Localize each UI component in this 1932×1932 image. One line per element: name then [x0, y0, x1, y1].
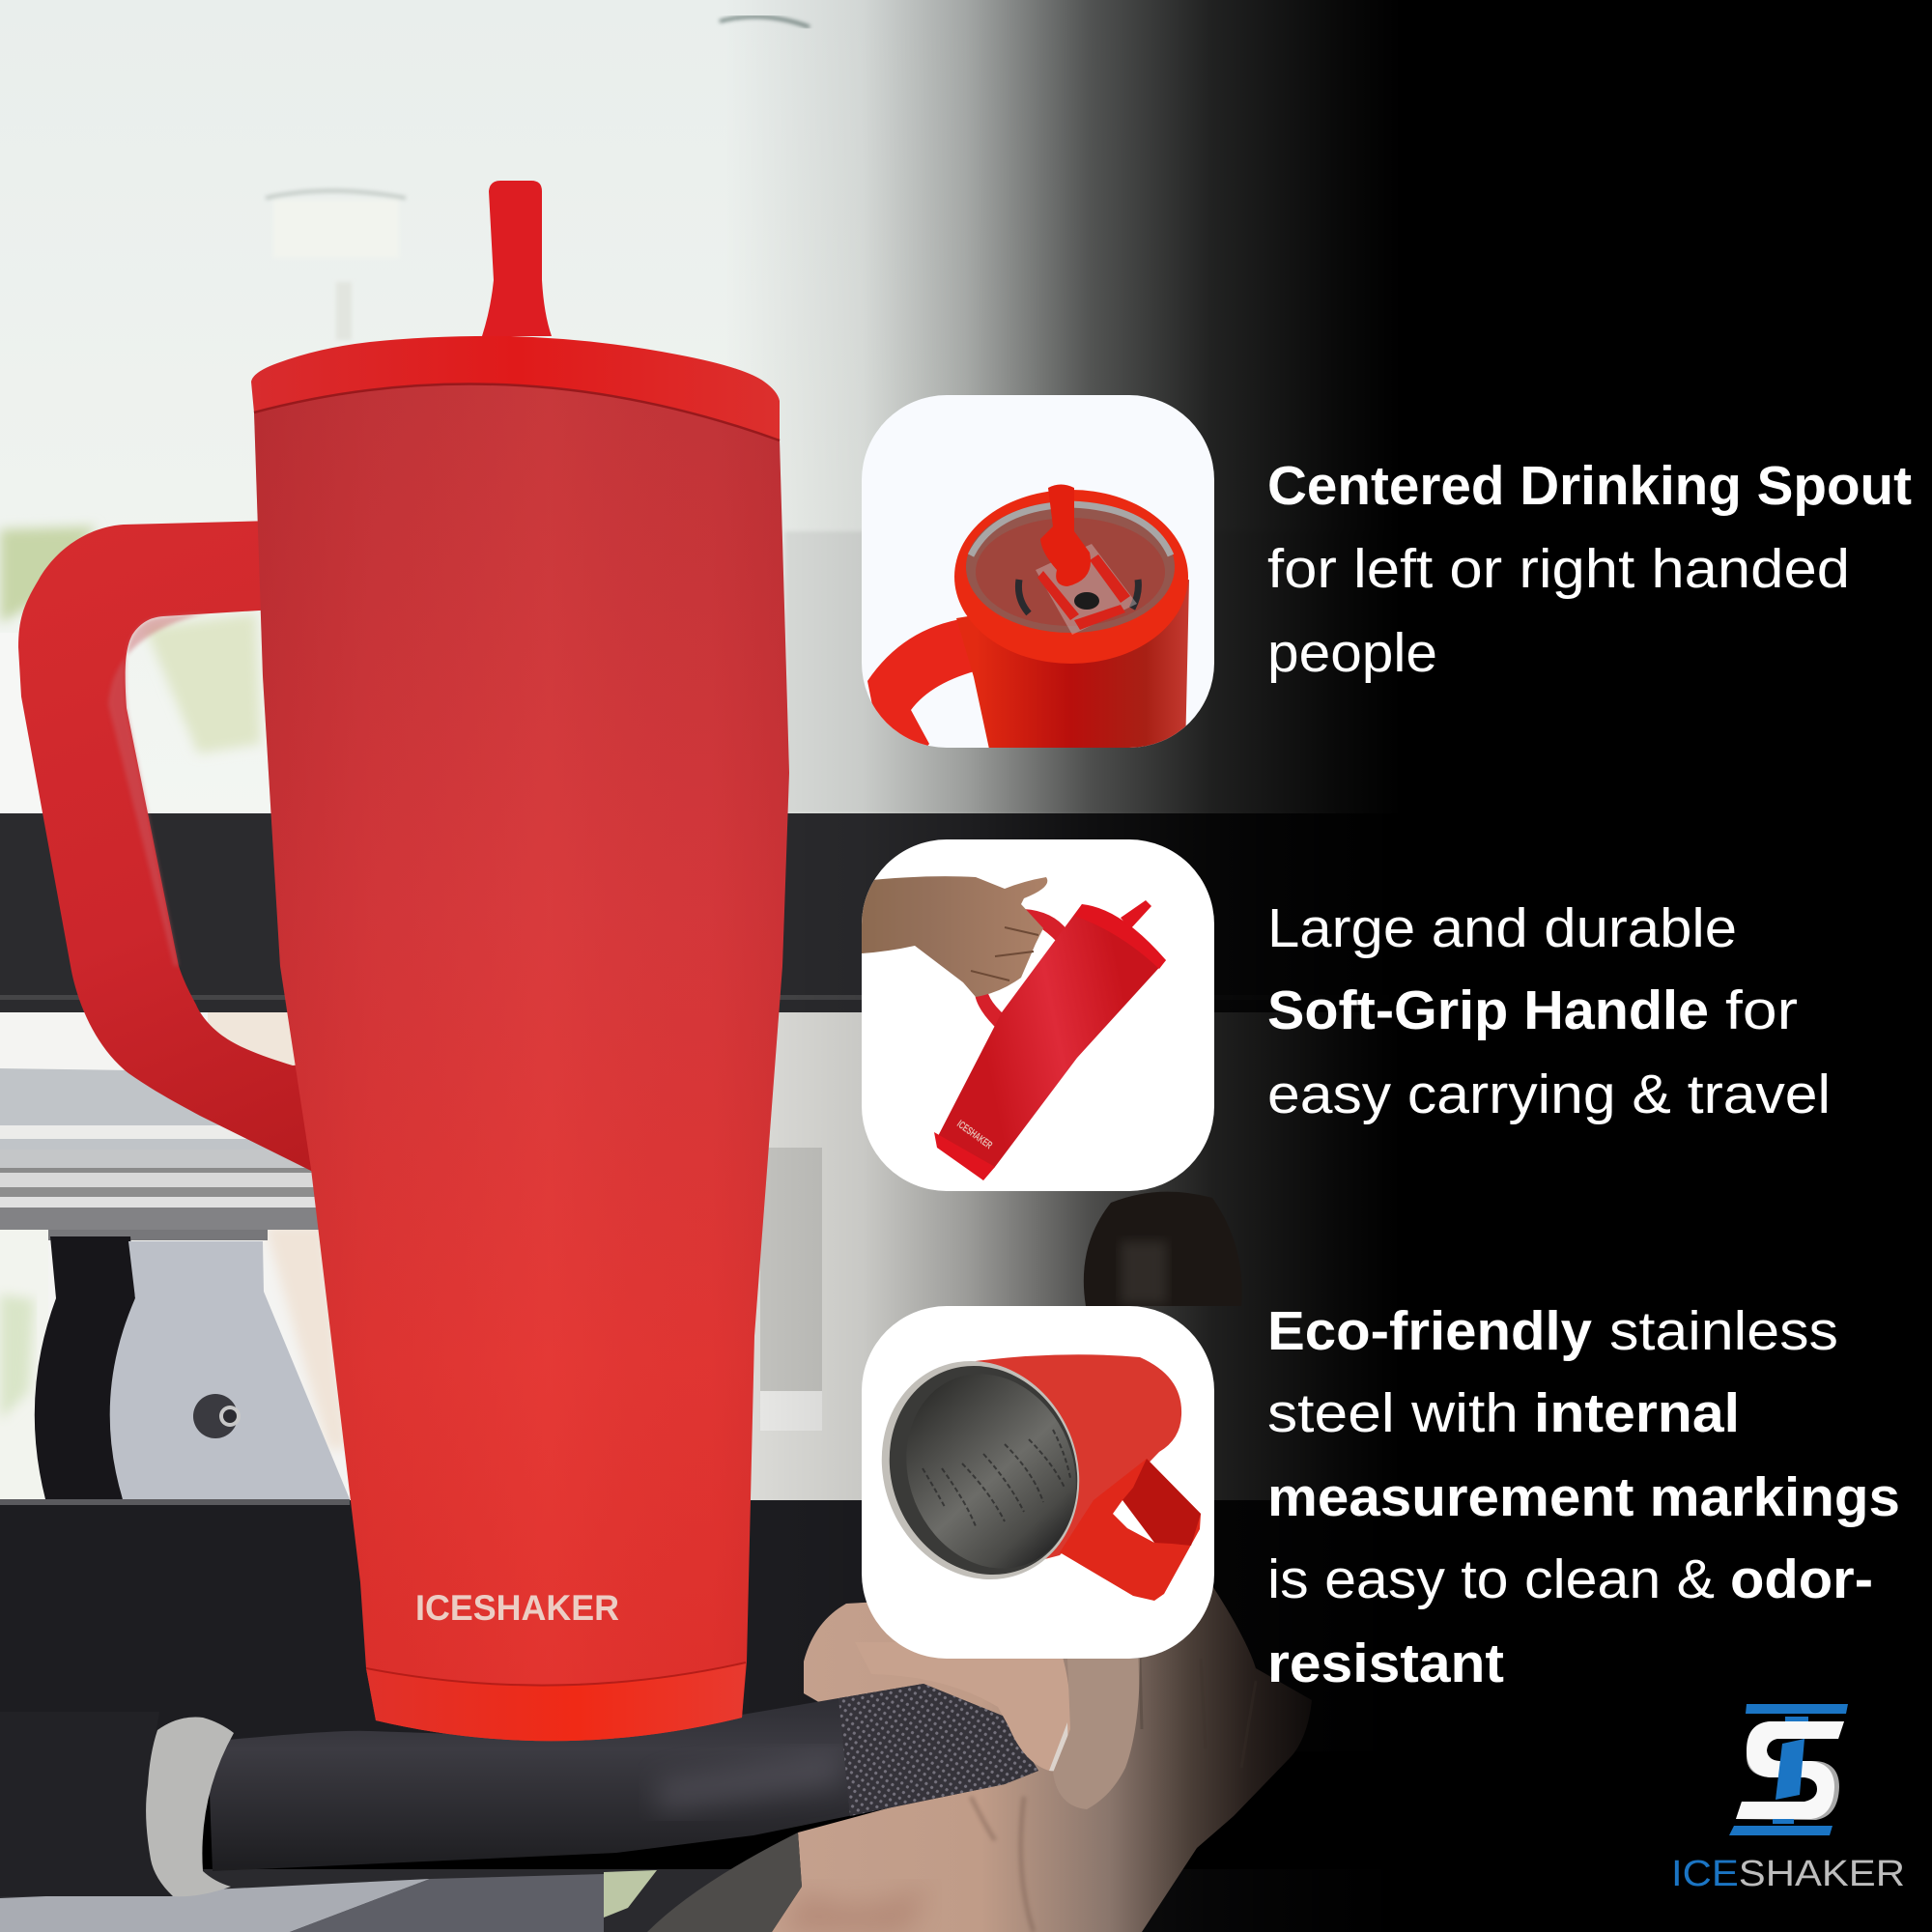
- ceiling light fixture far: [720, 16, 810, 27]
- lid: [1074, 904, 1166, 969]
- panel: steel interior photo: [849, 1306, 1214, 1659]
- bracket: [48, 1230, 268, 1240]
- line three: easy carrying & travel: [1267, 1064, 1831, 1125]
- base: [934, 1132, 995, 1180]
- exercise machine arm: [0, 1068, 319, 1230]
- line three: people: [1267, 622, 1437, 684]
- picture frame: [760, 1148, 822, 1431]
- line two end: for: [1725, 980, 1798, 1041]
- knurled grip: [838, 1684, 1038, 1816]
- handle: [18, 521, 324, 1175]
- body: [246, 328, 797, 1758]
- carried tumbler illustration: [862, 876, 1166, 1180]
- beam lower edge: [0, 995, 1410, 1000]
- right side darkening overlay: [724, 0, 1932, 1932]
- sleeve: [647, 1833, 802, 1932]
- floor: [0, 1869, 1410, 1932]
- handle inner highlight: [108, 612, 208, 966]
- straw: [1040, 485, 1091, 586]
- line two start: steel with: [1267, 1382, 1519, 1444]
- silver ring: [146, 1718, 234, 1896]
- bottom blue bar: [1729, 1826, 1833, 1835]
- handle front band: [1060, 1459, 1201, 1601]
- left window: [0, 1230, 48, 1500]
- finger over grip: [855, 1642, 1070, 1771]
- interior ring: [889, 1366, 1078, 1575]
- peach reflection: [265, 1225, 348, 1449]
- palm shading: [782, 1884, 927, 1932]
- bar highlight: [657, 1750, 840, 1814]
- black pad: [0, 1500, 1410, 1751]
- cream strip behind handle: [208, 1012, 304, 1070]
- panel background: [862, 395, 1214, 748]
- feature text: centered spout: [1267, 455, 1912, 684]
- finger creases: [971, 927, 1038, 980]
- line four bold: odor-: [1730, 1548, 1873, 1610]
- measurement markings: [923, 1430, 1070, 1526]
- top stem: [1785, 1717, 1808, 1721]
- line one end: stainless: [1609, 1300, 1838, 1362]
- ceiling and wall: [0, 0, 1410, 821]
- heading: Centered Drinking Spout: [1267, 455, 1912, 517]
- line four start: is easy to clean &: [1267, 1548, 1715, 1610]
- dark beam: [0, 813, 1410, 1012]
- finger separators: [1140, 1659, 1256, 1768]
- machine plate: [110, 1241, 350, 1499]
- clear lid: [966, 501, 1175, 633]
- spout tumbler illustration: [867, 485, 1189, 753]
- cup body: [976, 1354, 1181, 1575]
- pad top edge: [0, 1499, 350, 1505]
- line two bold: internal: [1534, 1382, 1740, 1444]
- cup body: [936, 904, 1166, 1177]
- base band: [366, 1662, 746, 1741]
- top blue bar: [1746, 1704, 1848, 1714]
- brand engraving: ICESHAKER: [415, 1588, 619, 1628]
- ceiling light fixture near: [266, 191, 406, 340]
- palm crease: [971, 1797, 1034, 1932]
- rim: [954, 490, 1188, 664]
- lid dark arcs: [1018, 580, 1138, 613]
- open tumbler illustration: [881, 1354, 1201, 1601]
- grip bar: [208, 1684, 1038, 1871]
- vent hole: [1074, 592, 1099, 610]
- line three bold: measurement markings: [1267, 1466, 1900, 1528]
- engraving: ICESHAKER: [954, 1119, 994, 1151]
- feature text: handle: [1267, 897, 1831, 1125]
- straw: [1121, 900, 1151, 929]
- line two: for left or right handed: [1267, 538, 1850, 600]
- right wall: [749, 1012, 1410, 1505]
- left pad segment: [0, 1712, 173, 1896]
- handle inner shadow: [1122, 1459, 1201, 1546]
- pulley wheel: [35, 1236, 135, 1499]
- line five bold: resistant: [1267, 1633, 1504, 1694]
- lid: [251, 336, 780, 440]
- brand logo: [1671, 1704, 1905, 1894]
- panel background: [862, 1306, 1214, 1659]
- cup body: [956, 580, 1189, 753]
- wordmark: ICESHAKER: [1671, 1854, 1905, 1894]
- handle: [867, 620, 972, 746]
- window blinds right: [784, 531, 1410, 813]
- wall below beam: [0, 1012, 1410, 1505]
- blue I: [1776, 1739, 1804, 1800]
- opening rim: [881, 1361, 1080, 1579]
- handle hole: [1113, 1500, 1154, 1543]
- fingernail: [1049, 1722, 1068, 1771]
- lid rails: [1037, 554, 1130, 630]
- lid seam: [254, 384, 780, 440]
- hand palm: [772, 1584, 1312, 1932]
- panel background: [862, 839, 1214, 1191]
- panel: soft-grip handle photo: [862, 839, 1214, 1191]
- base seam: [366, 1662, 746, 1686]
- interior: [906, 1376, 1076, 1568]
- S shadow: [1736, 1721, 1844, 1820]
- lid shine: [971, 504, 1171, 555]
- bold phrase: Soft-Grip Handle: [1267, 980, 1709, 1041]
- hex bolt: [193, 1394, 241, 1438]
- white wall lower left: [0, 633, 126, 816]
- handle: [975, 909, 1067, 1032]
- woman's hair: [1084, 1192, 1242, 1306]
- bold phrase: Eco-friendly: [1267, 1300, 1592, 1362]
- straw: [482, 181, 552, 336]
- clear vent window: [1036, 544, 1137, 635]
- S white: [1736, 1721, 1844, 1819]
- main red tumbler: [18, 181, 797, 1758]
- line one: Large and durable: [1267, 897, 1737, 959]
- plants through window: [0, 526, 261, 753]
- second finger tip: [1053, 1659, 1140, 1809]
- panel: centered spout photo: [862, 395, 1214, 753]
- arm and hand: [862, 876, 1047, 997]
- bottom stem: [1773, 1819, 1794, 1824]
- feature text: steel: [1267, 1300, 1900, 1694]
